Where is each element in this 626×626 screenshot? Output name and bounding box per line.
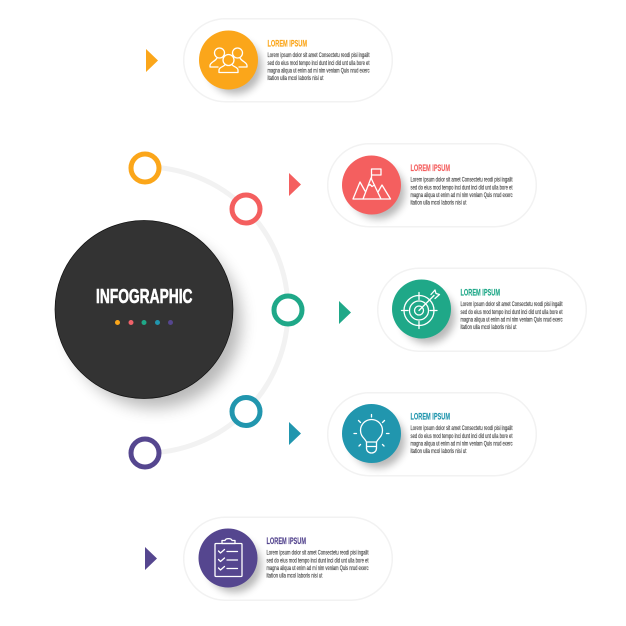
- panel: card 2 red: [328, 144, 536, 227]
- text block: [410, 425, 513, 455]
- text block: itation ulla mcol laboris nisi ut: [410, 199, 467, 206]
- text block: magna aliqua ut enim ad mi nim veniam Quis nrud exerc: [460, 316, 562, 324]
- arrow: green: [339, 301, 351, 324]
- heading: LOREM IPSUM: [266, 536, 306, 546]
- panel: card 3 green: [378, 268, 586, 351]
- icon: light bulb: [354, 414, 389, 453]
- heading: LOREM IPSUM: [460, 288, 500, 298]
- text block: itation ulla mcol laboris nisi ut: [266, 572, 323, 579]
- arrow: orange: [146, 49, 158, 72]
- text block: Lorem ipsum dolor sit amet Consectetu reodi pisi ingalit: [268, 52, 370, 59]
- text block: magna aliqua ut enim ad mi nim veniam Quis nrud exerc: [266, 565, 368, 572]
- text block: Lorem ipsum dolor sit amet Consectetu reodi pisi ingalit: [266, 550, 369, 557]
- text block: magna aliqua ut enim ad mi nim veniam Quis nrud exerc: [410, 192, 512, 199]
- text block: sed do eius mod tempo inci dunt inci did unt ulla bore et: [266, 557, 369, 564]
- ring: orange: [131, 154, 159, 182]
- text block: Lorem ipsum dolor sit amet Consectetu reodi pisi ingalit: [410, 177, 513, 184]
- arrow: teal: [289, 422, 301, 445]
- text block: sed do eius mod tempo inci dunt inci did unt ulla bore et: [268, 60, 370, 67]
- text block: [410, 177, 513, 206]
- text block: itation ulla mcol laboris nisi ut: [460, 324, 517, 331]
- ring: purple: [131, 439, 159, 467]
- text block: itation ulla mcol laboris nisi ut: [268, 75, 324, 82]
- heading: LOREM IPSUM: [268, 38, 307, 48]
- text block: magna aliqua ut enim ad mi nim veniam Quis nrud exerc: [410, 440, 512, 448]
- arrow: purple: [145, 547, 157, 570]
- text block: sed do eius mod tempo inci dunt inci did unt ulla bore et: [410, 433, 513, 440]
- arc connector: [145, 167, 288, 453]
- icon: target: [402, 290, 440, 328]
- icon: people: [210, 48, 247, 72]
- colour dots: [115, 320, 173, 325]
- arrow: red: [289, 173, 301, 196]
- panel: card 5 purple: [184, 517, 392, 600]
- text block: sed do eius mod tempo inci dunt inci did unt ulla bore et: [460, 309, 563, 316]
- text block: itation ulla mcol laboris nisi ut: [410, 448, 467, 455]
- central circle: [55, 220, 241, 408]
- text block: [460, 301, 563, 331]
- central title: INFOGRAPHIC: [96, 286, 192, 308]
- icon: mountain flag: [353, 169, 390, 199]
- panel: card 1 orange: [184, 19, 392, 102]
- text block: sed do eius mod tempo inci dunt inci did unt ulla bore et: [410, 184, 513, 191]
- ring: teal: [232, 398, 260, 426]
- text block: Lorem ipsum dolor sit amet Consectetu reodi pisi ingalit: [410, 425, 513, 432]
- text block: Lorem ipsum dolor sit amet Consectetu reodi pisi ingalit: [460, 301, 563, 308]
- text block: magna aliqua ut enim ad mi nim veniam Quis nrud exerc: [268, 68, 370, 74]
- icon: clipboard checklist: [215, 539, 242, 576]
- panel: card 4 teal: [328, 393, 536, 476]
- ring: red: [232, 195, 260, 223]
- heading: LOREM IPSUM: [410, 412, 450, 422]
- text block: [268, 52, 370, 82]
- ring: green: [274, 296, 302, 324]
- text block: [266, 550, 369, 579]
- heading: LOREM IPSUM: [410, 163, 450, 173]
